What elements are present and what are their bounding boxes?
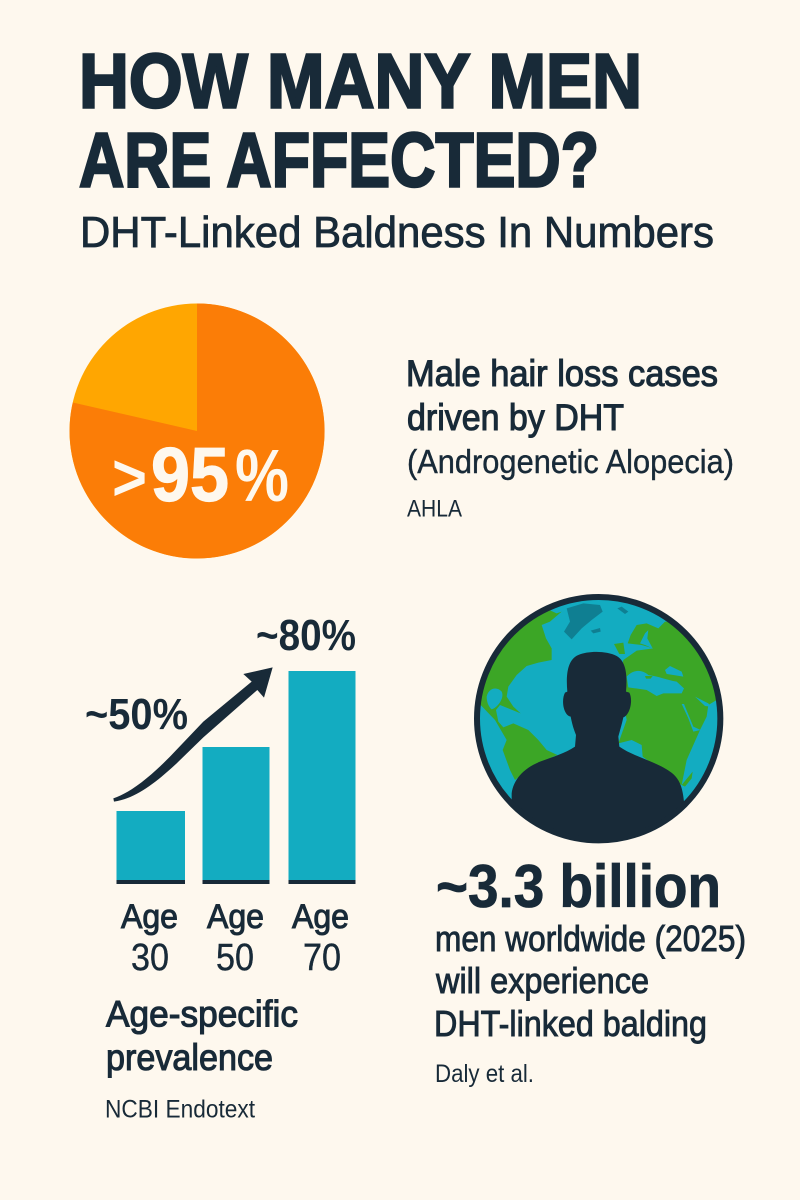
land: Europe, Africa, Asia — [618, 622, 727, 785]
pie chart: >95%: > — [112, 440, 147, 514]
axis label: age 30 — [121, 898, 178, 979]
title: ARE AFFECTED? — [79, 118, 599, 204]
Greenland — [564, 603, 603, 639]
Black Sea — [665, 666, 683, 677]
pie description: Male hair loss cases — [406, 353, 718, 394]
Persian Gulf — [695, 696, 709, 706]
pie description: (Androgenetic Alopecia) — [407, 443, 734, 480]
stat description: will experience — [435, 960, 649, 1001]
axis label: age 70: 70 — [303, 937, 341, 979]
source: AHLA: AHLA — [407, 496, 462, 522]
stat description: men worldwide (2025) — [435, 918, 746, 959]
stat: ~3.3 billion: ~3.3 billion — [436, 853, 721, 920]
silhouette: man — [512, 652, 684, 847]
stat description — [434, 918, 746, 1044]
value: ~80%: ~80% — [256, 611, 356, 660]
source: Daly et al.: Daly et al. — [435, 1060, 534, 1088]
Baltic inlet — [640, 630, 653, 648]
bar: age 30 — [116, 811, 185, 884]
pie description — [406, 353, 734, 480]
bar: age 50 — [202, 747, 270, 884]
pie description: driven by DHT — [407, 397, 624, 438]
Mediterranean sea — [627, 671, 684, 696]
bar chart caption: prevalence — [106, 1037, 273, 1078]
axis label: age 70: Age — [292, 898, 349, 936]
bar chart caption — [106, 994, 298, 1078]
Arctic island — [591, 628, 601, 633]
Red Sea — [682, 704, 701, 732]
pie chart: >95% — [70, 303, 325, 558]
value: ~50%: ~50% — [85, 690, 188, 739]
axis label: age 50: 50 — [216, 937, 254, 979]
axis label: age 30: Age — [121, 898, 178, 936]
bar chart caption: Age-specific — [106, 994, 298, 1034]
axis label: age 50: Age — [207, 898, 264, 936]
land: Mediterranean island — [645, 676, 653, 679]
Arctic island — [617, 607, 628, 614]
pie chart: >95%: 95 — [151, 433, 229, 518]
arrow: rising trend — [113, 667, 273, 802]
stat description: DHT-linked balding — [434, 1003, 707, 1044]
land: Americas — [477, 610, 562, 780]
title: HOW MANY MEN — [79, 38, 642, 124]
axis label: age 50 — [207, 898, 264, 979]
title — [79, 38, 642, 204]
land: Caribbean island — [523, 630, 536, 640]
source: NCBI Endotext: NCBI Endotext — [105, 1096, 255, 1124]
lake: Hudson — [487, 689, 502, 709]
icon: globe with male silhouette — [477, 597, 727, 847]
axis label: age 70 — [292, 898, 349, 979]
land: Britain — [614, 643, 625, 654]
axis label: age 30: 30 — [131, 937, 169, 979]
bar: age 70 — [288, 671, 356, 884]
bar chart: age-specific prevalence — [85, 611, 356, 979]
subtitle: DHT-Linked Baldness In Numbers — [80, 208, 714, 257]
pie chart: >95%: % — [235, 434, 289, 517]
land: Madagascar — [682, 772, 693, 787]
